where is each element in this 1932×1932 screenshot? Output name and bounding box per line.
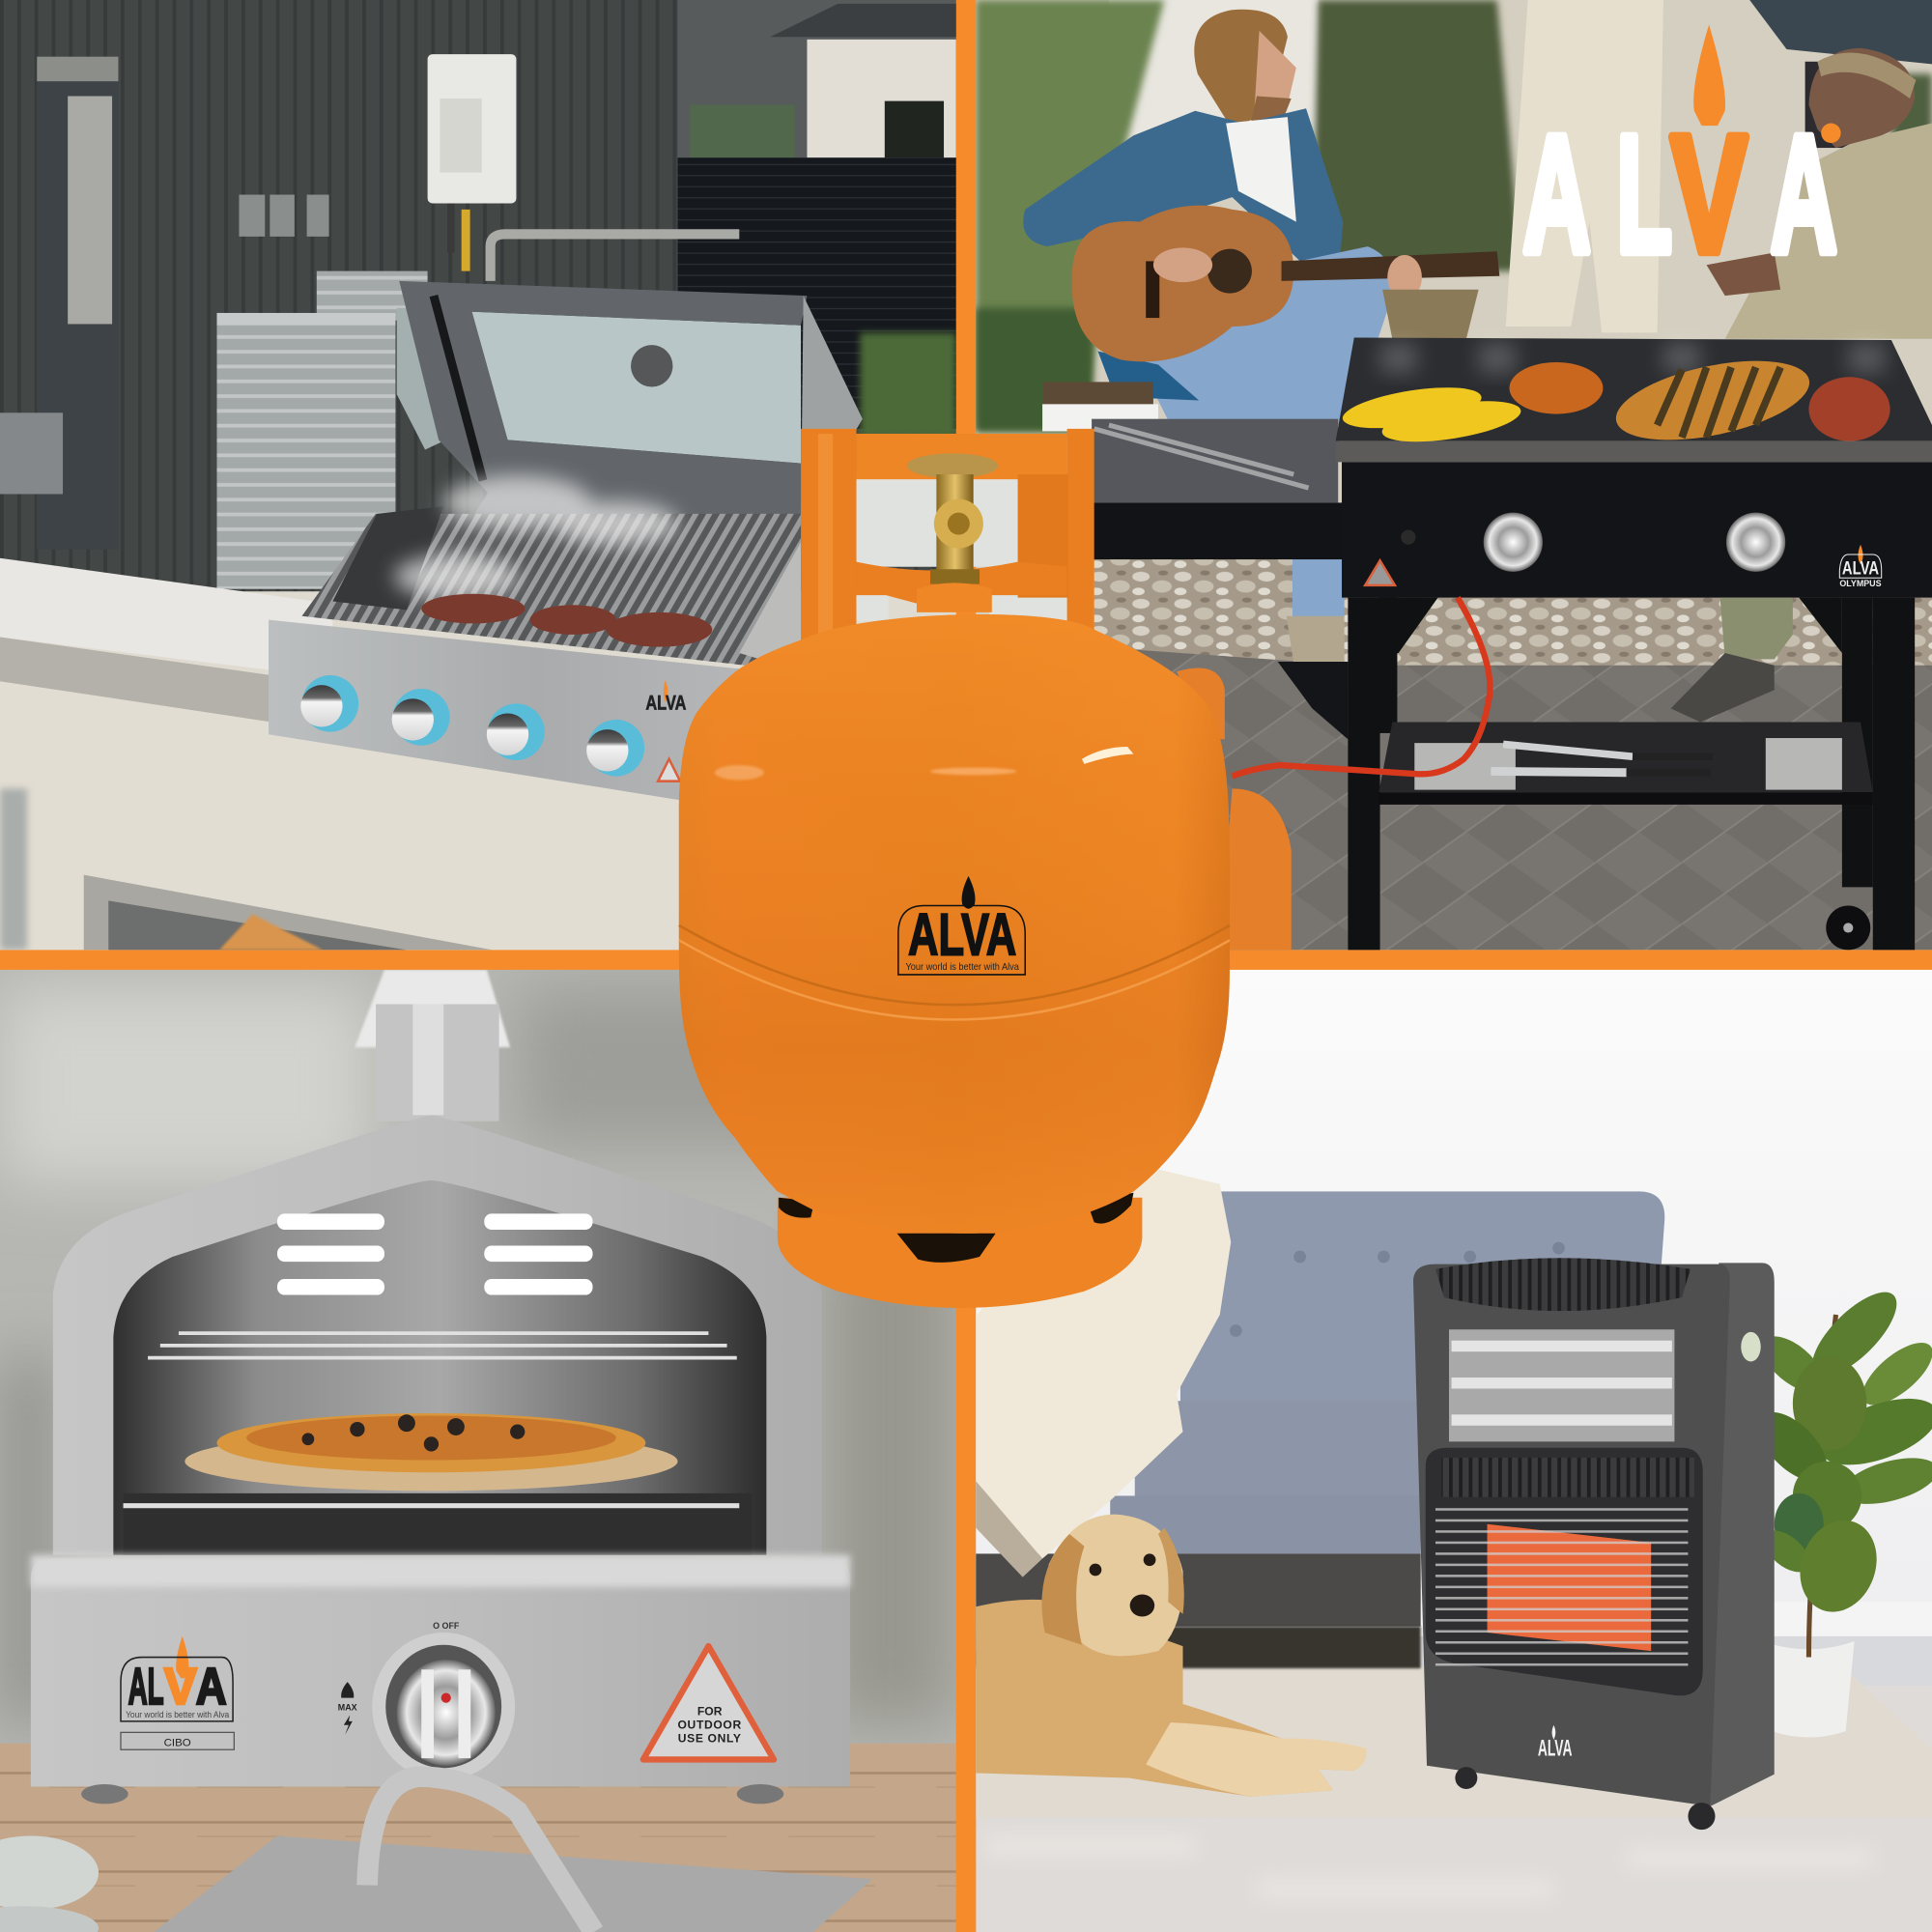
background seen through handle [856, 474, 1069, 631]
white ALVA logo: A [1523, 101, 1591, 287]
quartz heater [1449, 1329, 1674, 1441]
handle top band [856, 434, 1067, 479]
grill front panel [269, 620, 740, 800]
rug [976, 1665, 1932, 1817]
dark slatted wall [0, 0, 956, 591]
ceramic burner [1488, 1524, 1651, 1651]
left step shelf [1278, 662, 1348, 739]
gas cylinder [679, 429, 1230, 1308]
oven feet [81, 1784, 783, 1804]
handle hole [1741, 1332, 1761, 1361]
corn [1340, 380, 1523, 449]
electrical boxes [239, 195, 329, 237]
jeans leg and boot [1287, 554, 1345, 668]
dog body [976, 1600, 1367, 1797]
white ALVA logo: V [1671, 101, 1747, 287]
pot [1762, 1641, 1855, 1737]
steel tray [154, 1836, 872, 1932]
counter ledge and wall [0, 558, 679, 951]
handle lower band [856, 562, 1067, 604]
cushions [0, 1836, 99, 1932]
herringbone floor [1094, 647, 1932, 950]
grill [269, 234, 863, 801]
person legs and shoes [1671, 598, 1793, 722]
chimney [355, 970, 510, 1122]
oven ALVA logo: AL [128, 1659, 164, 1716]
griddle knobs [1401, 513, 1785, 572]
warning label [1365, 560, 1395, 585]
griddle cart [1233, 337, 1932, 950]
burger patties [421, 594, 712, 647]
top vent [1435, 1258, 1690, 1311]
shirt hem [1097, 352, 1199, 401]
panel base floor [976, 970, 1932, 1932]
guitar [1072, 206, 1499, 361]
oven interior [113, 1180, 766, 1555]
oven ALVA logo: A [196, 1659, 227, 1716]
heater side [1710, 1263, 1775, 1806]
sofa [976, 1191, 1664, 1668]
neck [917, 582, 992, 612]
plant [1747, 1280, 1932, 1737]
jeans [1140, 246, 1393, 425]
white wall [976, 970, 1932, 1635]
grilled fish [1609, 346, 1816, 455]
max flame label: MAX [338, 1702, 357, 1712]
oven ALVA logo [121, 1636, 233, 1721]
safety triangle [643, 1646, 774, 1759]
wooden table [0, 1744, 956, 1932]
body shading [679, 614, 1230, 1234]
CIBO label: CIBO [164, 1737, 191, 1748]
cream blanket [976, 1169, 1231, 1559]
heater logo: ALVA [1538, 1736, 1573, 1762]
oven hood [53, 1115, 822, 1555]
blanket fringe [976, 1481, 1042, 1577]
wall backdrop [976, 0, 1932, 950]
cylinder ALVA logo: Your world is better with Alva [906, 962, 1019, 973]
wire guard [1435, 1506, 1688, 1672]
oven base [31, 1555, 850, 1786]
cylinder body [679, 614, 1230, 1234]
standing person [1506, 0, 1932, 332]
gravel [1094, 557, 1932, 670]
safety triangle: FOR [697, 1705, 723, 1719]
griddle logo: OLYMPUS [1839, 579, 1882, 588]
distant house and fence [678, 0, 956, 438]
griddle logo: ALVA [1842, 558, 1879, 579]
brass valve [907, 453, 998, 584]
pale wall behind man [1109, 0, 1319, 148]
right side wall [740, 543, 801, 659]
air conditioner units [216, 271, 428, 589]
wheel [1826, 906, 1870, 950]
safety triangle: OUTDOOR [678, 1719, 742, 1732]
dog legs [1146, 1722, 1367, 1797]
glass lid [397, 281, 863, 524]
gas hose [1233, 598, 1490, 777]
handle posts [801, 429, 1094, 640]
dog face [1090, 1553, 1155, 1616]
grilled steak [1808, 377, 1890, 441]
floor streaks [985, 1836, 1873, 1899]
water heater [428, 54, 516, 271]
stem [1808, 1315, 1836, 1658]
gas heater [1413, 1258, 1775, 1830]
panel: outdoor built-in grill [0, 0, 956, 950]
smoke [394, 475, 678, 599]
cylinder ALVA logo [898, 876, 1025, 975]
grilled vegetables [1509, 362, 1603, 414]
white ALVA logo: A [1771, 101, 1837, 287]
denim shirt [1023, 108, 1343, 261]
CIBO label [121, 1732, 234, 1749]
lid handle [491, 234, 739, 281]
lower shelf [1378, 722, 1873, 805]
hands [1153, 247, 1422, 299]
floor behind rug [1417, 1636, 1932, 1686]
panel base [0, 0, 956, 950]
papers [1414, 738, 1842, 790]
blurred stone backdrop [0, 970, 956, 1758]
burner vent [1441, 1458, 1694, 1497]
burner knobs [300, 675, 644, 777]
castors [1455, 1767, 1716, 1830]
tongs [1094, 425, 1309, 488]
pizza on stone [185, 1413, 678, 1491]
panel: pizza oven [0, 970, 956, 1932]
griddle body [1342, 462, 1932, 598]
bamboo and shrubs [976, 0, 1932, 431]
max flame label [338, 1682, 357, 1735]
upper rack [148, 1333, 737, 1358]
tray handle [367, 1776, 594, 1932]
base ring [778, 1193, 1142, 1308]
safety triangle: USE ONLY [678, 1732, 742, 1746]
left side wall [332, 506, 443, 610]
grill logo: ALVA [645, 691, 687, 715]
post highlight [818, 434, 833, 637]
skirting [976, 1602, 1932, 1651]
heater front [1413, 1264, 1730, 1806]
panel: living room heater [976, 970, 1932, 1932]
white ALVA logo: L [1616, 101, 1672, 287]
griddle lip [1336, 441, 1932, 462]
oven ALVA logo: Your world is better with Alva [126, 1710, 229, 1719]
second cylinder reflection [1177, 668, 1292, 950]
cylinder ALVA logo: ALVA [908, 902, 1016, 968]
leaves [1747, 1280, 1932, 1623]
burner panel [1426, 1448, 1703, 1695]
oven knob [372, 1633, 515, 1780]
heater logo [1538, 1725, 1573, 1762]
off label: O OFF [433, 1621, 460, 1631]
weld seam [679, 925, 1230, 1005]
white ALVA logo [1523, 25, 1837, 287]
dark floor [124, 1493, 752, 1555]
panel: griddle party [976, 0, 1932, 950]
lower rack [124, 1504, 739, 1508]
warning triangle [658, 759, 680, 781]
side shelf [1092, 419, 1343, 559]
oven ALVA logo: V [164, 1659, 197, 1716]
kneeling person [1707, 48, 1932, 339]
griddle logo [1839, 545, 1882, 588]
firebox and grates [301, 514, 801, 671]
dog ear left [1041, 1534, 1084, 1645]
griddle plate [1336, 337, 1932, 441]
dog head [1048, 1515, 1183, 1656]
fork and knife [1491, 744, 1713, 773]
steam [1380, 343, 1886, 373]
hair and head [1194, 10, 1296, 129]
highlights [715, 747, 1133, 780]
white t-shirt [1226, 117, 1296, 222]
dog ear right [1158, 1528, 1184, 1614]
vent slots [277, 1213, 593, 1295]
cart legs [1348, 598, 1915, 950]
bench and white plinth [1042, 290, 1479, 431]
golden retriever [976, 1515, 1367, 1797]
man playing guitar [1023, 10, 1499, 425]
handle right plate [1018, 474, 1068, 598]
wall cabinet [0, 57, 118, 550]
lower oven window [84, 875, 493, 950]
grill logo [645, 680, 686, 710]
